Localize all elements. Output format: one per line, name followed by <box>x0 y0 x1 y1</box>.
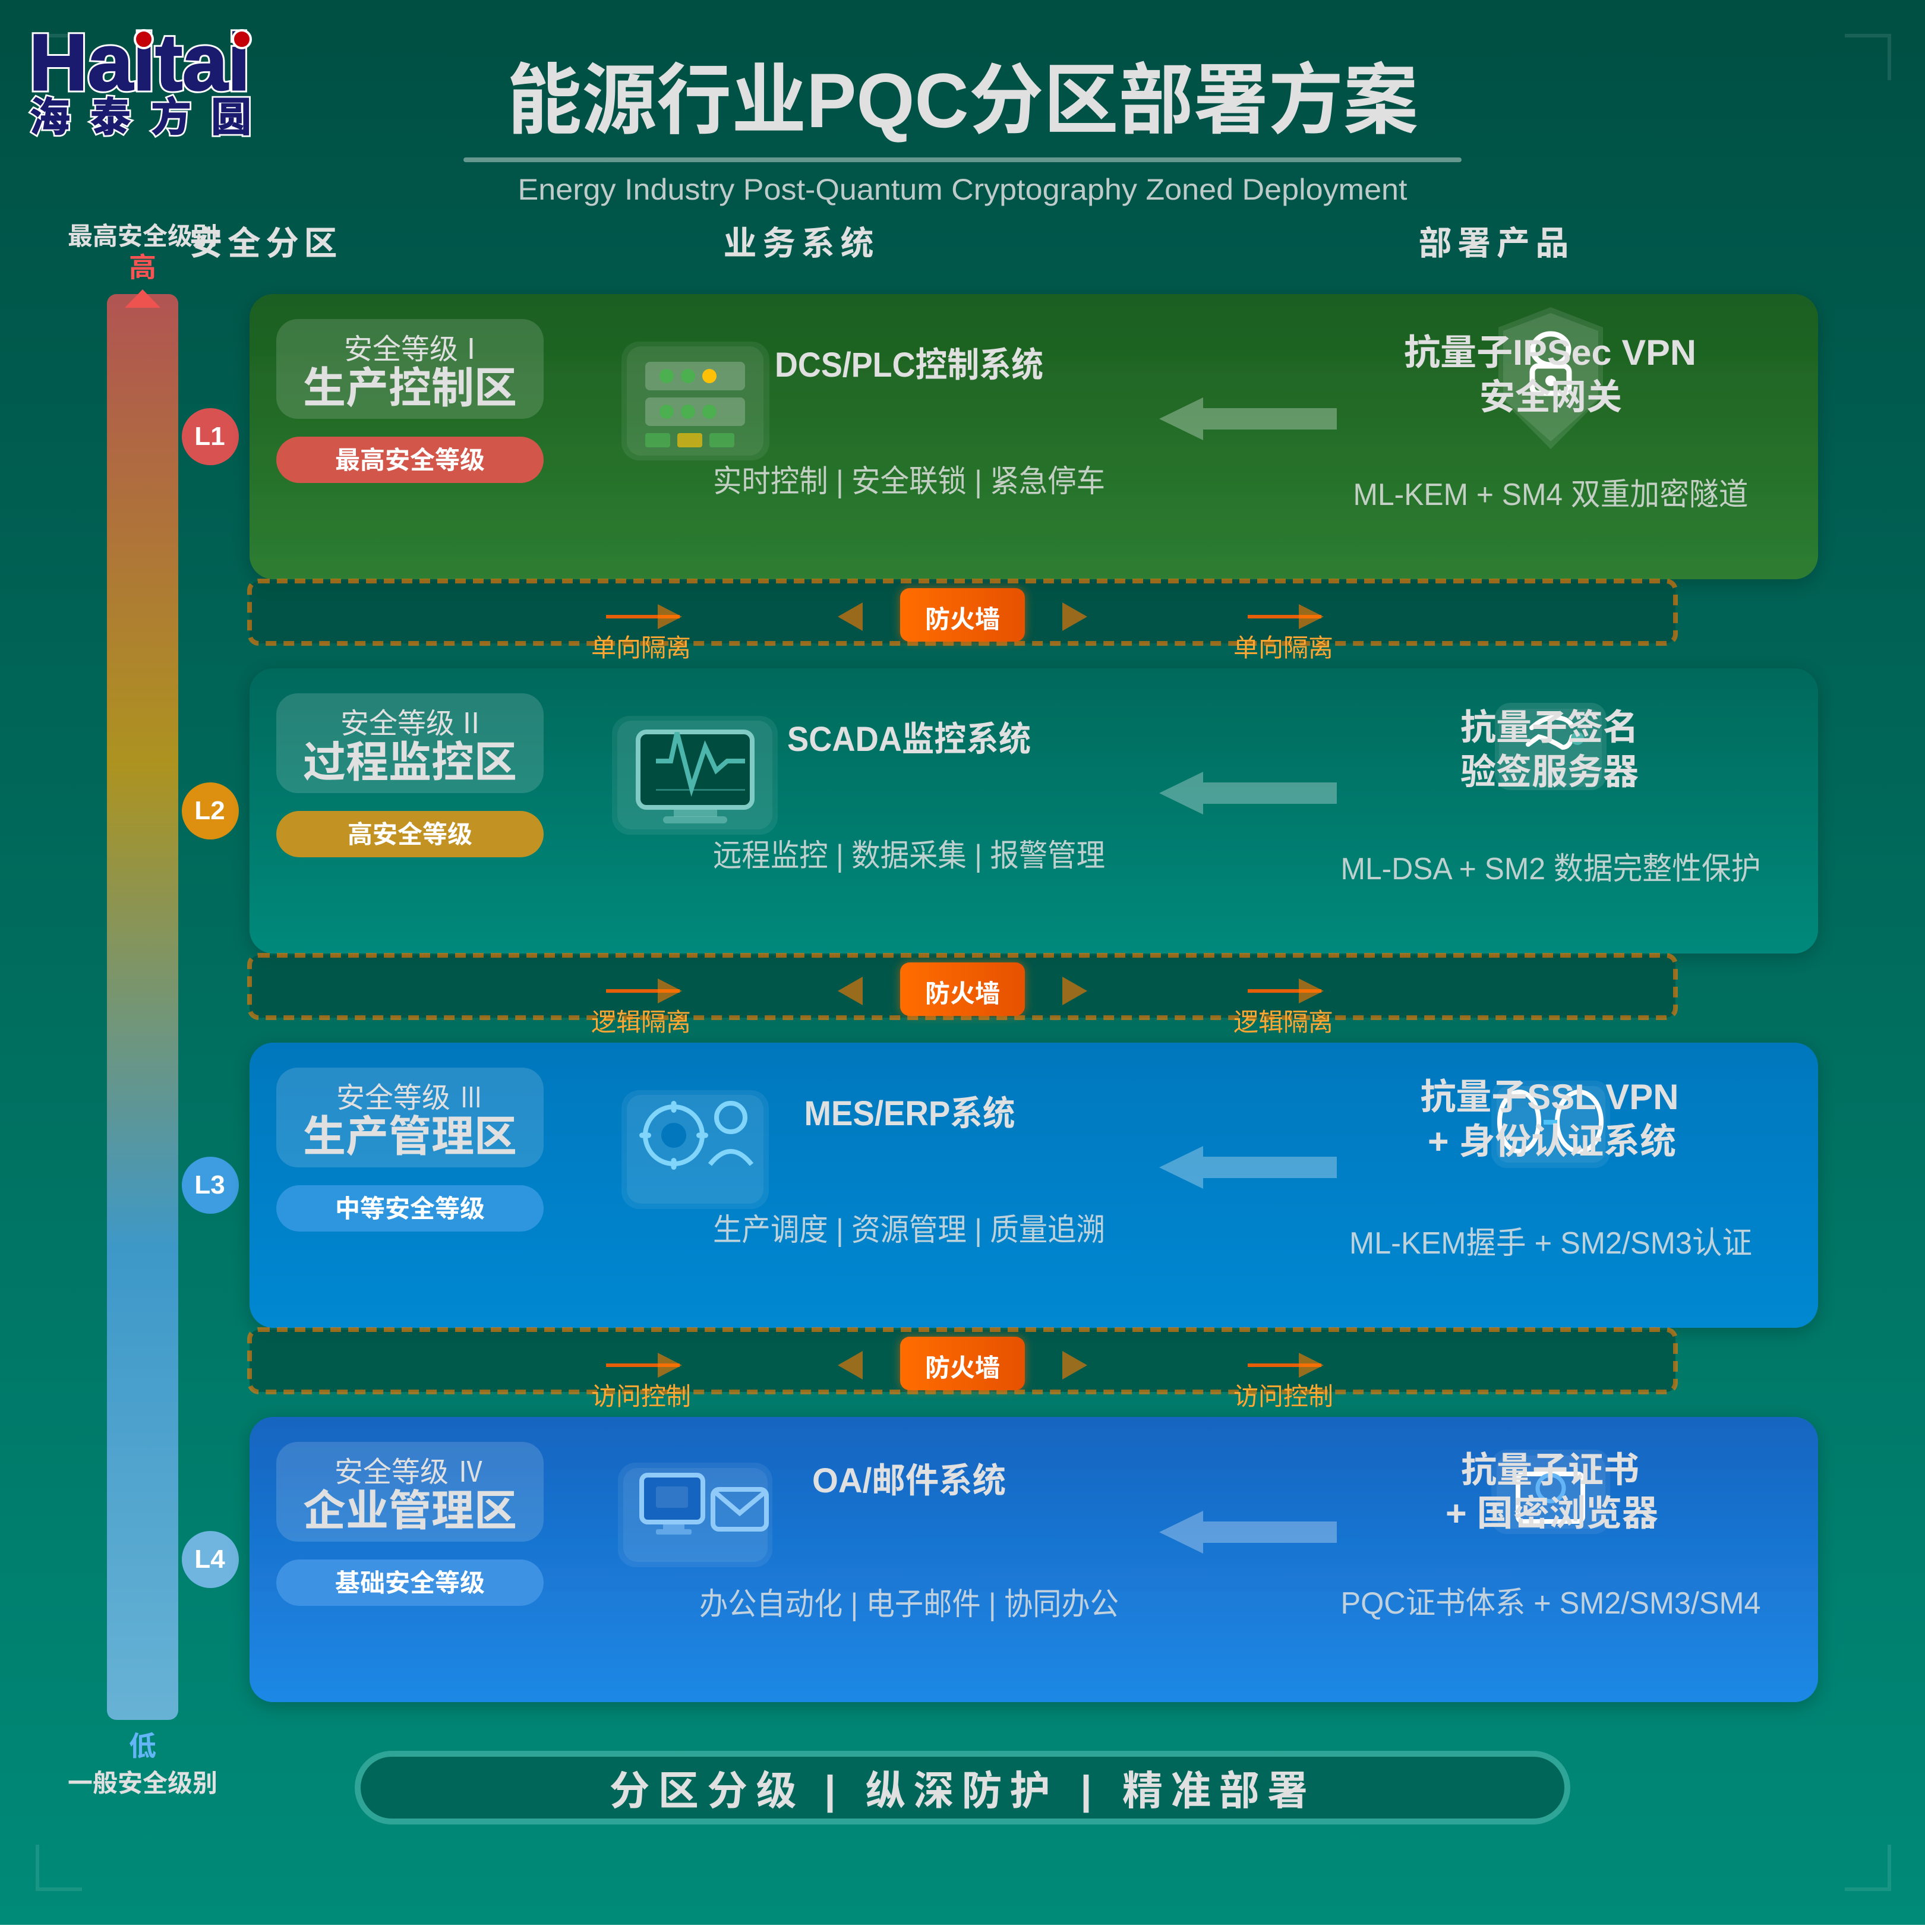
level pill: 基础安全等级 <box>335 1569 485 1597</box>
column header: business system: 业务系统 <box>724 225 873 262</box>
firewall band 2: 逻辑隔离 <box>1233 1008 1333 1036</box>
firewall band 3 <box>250 1330 1675 1410</box>
zone card <box>276 319 544 419</box>
firewall band 2: 防火墙 <box>925 980 1000 1008</box>
bottom slogan bar: 纵深防护 <box>865 1769 1050 1814</box>
arrow: product to system <box>1159 772 1337 815</box>
product name: 安全网关 <box>1479 377 1622 417</box>
logo: Haitai: 方 <box>151 95 191 140</box>
system description: 生产调度 | 资源管理 | 质量追溯 <box>713 1213 1105 1248</box>
firewall band 2 <box>250 955 1675 1036</box>
level pill <box>276 811 544 857</box>
title: 能源行业PQC分区部署方案 <box>507 57 1418 144</box>
level badge L1: L1 <box>194 422 225 451</box>
product name <box>1420 1077 1679 1161</box>
level badge L3: L3 <box>194 1170 225 1199</box>
scale bar: 最高安全级别 <box>68 222 217 250</box>
icon: target and person <box>621 1090 769 1209</box>
title underline <box>463 157 1462 162</box>
scale bar <box>68 222 217 1797</box>
zone card: Ⅲ <box>459 1082 483 1114</box>
product spec: ML-KEM握手 + SM2/SM3认证 <box>1349 1226 1752 1261</box>
zone card <box>276 1068 544 1167</box>
scale bar: 低 <box>129 1731 156 1761</box>
zone card: Ⅳ <box>457 1457 484 1488</box>
zone card <box>276 1442 544 1542</box>
icon: server <box>621 342 769 460</box>
icon: shield lock <box>1498 307 1603 449</box>
bottom slogan bar: 精准部署 <box>1122 1769 1308 1814</box>
firewall band 1: 防火墙 <box>925 605 1000 633</box>
level badge L4 <box>182 1531 239 1588</box>
bottom slogan bar: | <box>1080 1767 1092 1813</box>
logo: Haitai: 泰 <box>90 95 131 140</box>
level pill <box>276 1185 544 1232</box>
arrow: product to system <box>1159 1146 1337 1189</box>
product name: + 国密浏览器 <box>1446 1494 1658 1533</box>
level badge L2: L2 <box>194 796 225 825</box>
level pill <box>276 437 544 483</box>
zone card: Ⅱ <box>457 708 485 740</box>
product name <box>1460 708 1639 792</box>
level pill: 中等安全等级 <box>335 1195 485 1223</box>
level badge L3 <box>182 1157 239 1214</box>
subtitle: Energy Industry Post-Quantum Cryptography Zoned Deployment <box>518 173 1408 206</box>
firewall band 3: 访问控制 <box>1233 1382 1333 1410</box>
product name: 抗量子签名 <box>1460 708 1639 747</box>
zone card <box>276 693 544 793</box>
firewall band 1: 单向隔离 <box>1233 634 1333 662</box>
icon: computer and mail <box>618 1463 772 1567</box>
system name: OA/邮件系统 <box>812 1461 1006 1500</box>
zone card: 安全等级 <box>344 334 458 365</box>
icon: link rings <box>1491 1081 1610 1168</box>
panel: L2 process monitoring zone <box>250 668 1818 954</box>
level badge L1 <box>182 408 239 465</box>
product name: + 身份认证系统 <box>1428 1122 1676 1161</box>
level badge L4: L4 <box>194 1545 225 1574</box>
arrow: product to system <box>1159 397 1337 440</box>
logo: Haitai: 海 <box>30 95 70 140</box>
panel: L4 enterprise management zone <box>250 1417 1818 1702</box>
logo: Haitai: 海 <box>30 95 70 140</box>
column header: deployed product: 部署产品 <box>1419 225 1569 262</box>
product name: 抗量子IPSec VPN <box>1404 333 1696 372</box>
product name: 抗量子证书 <box>1461 1450 1639 1490</box>
icon: certificate <box>1491 1450 1610 1534</box>
system description: 实时控制 | 安全联锁 | 紧急停车 <box>713 465 1105 499</box>
zone card: 生产控制区 <box>303 365 517 412</box>
product name: 验签服务器 <box>1460 752 1639 792</box>
scale bar: 高 <box>129 252 156 283</box>
logo: Haitai: 圆 <box>211 95 251 140</box>
bottom slogan bar: | <box>824 1767 836 1813</box>
zone card: 过程监控区 <box>303 739 517 787</box>
firewall band 1: 单向隔离 <box>591 634 691 662</box>
bottom slogan bar: 分区分级 <box>610 1769 796 1814</box>
product name <box>1404 333 1696 417</box>
logo: Haitai: 方 <box>151 95 191 140</box>
firewall band 1 <box>250 581 1675 662</box>
product name <box>1446 1450 1658 1533</box>
zone card: Ⅰ <box>457 334 485 365</box>
product spec: PQC证书体系 + SM2/SM3/SM4 <box>1340 1586 1761 1621</box>
level pill <box>276 1560 544 1606</box>
logo: Haitai: 圆 <box>211 95 251 140</box>
level badge L2 <box>182 782 239 839</box>
scale bar: 一般安全级别 <box>68 1769 217 1797</box>
level pill: 高安全等级 <box>348 820 472 848</box>
firewall band 3: 防火墙 <box>925 1354 1000 1382</box>
system description: 办公自动化 | 电子邮件 | 协同办公 <box>699 1587 1119 1622</box>
product spec: ML-KEM + SM4 双重加密隧道 <box>1353 478 1748 512</box>
column header: security zone: 安全分区 <box>189 225 337 262</box>
level pill: 最高安全等级 <box>335 446 485 474</box>
system name: DCS/PLC控制系统 <box>775 346 1043 384</box>
panel: L3 production management zone <box>250 1043 1818 1328</box>
zone card: 企业管理区 <box>303 1488 517 1535</box>
product name: 抗量子SSL VPN <box>1420 1077 1679 1117</box>
system description: 远程监控 | 数据采集 | 报警管理 <box>713 839 1105 873</box>
system name: MES/ERP系统 <box>804 1094 1015 1133</box>
icon: signature <box>1495 703 1607 790</box>
logo: Haitai: 泰 <box>90 95 131 140</box>
logo: Haitai: Haitai <box>29 18 250 107</box>
firewall band 2: 逻辑隔离 <box>591 1008 691 1036</box>
panel: L1 production control zone <box>250 294 1818 579</box>
zone card: 安全等级 <box>336 1082 450 1114</box>
logo: Haitai: Haitai <box>29 18 250 107</box>
arrow: product to system <box>1159 1511 1337 1554</box>
product spec: ML-DSA + SM2 数据完整性保护 <box>1340 852 1761 886</box>
zone card: 安全等级 <box>334 1457 449 1488</box>
zone card: 生产管理区 <box>303 1113 517 1161</box>
system name: SCADA监控系统 <box>787 720 1031 759</box>
firewall band 3: 访问控制 <box>591 1382 691 1410</box>
icon: monitor <box>612 716 778 835</box>
bottom slogan bar <box>358 1754 1567 1821</box>
zone card: 安全等级 <box>340 708 455 740</box>
